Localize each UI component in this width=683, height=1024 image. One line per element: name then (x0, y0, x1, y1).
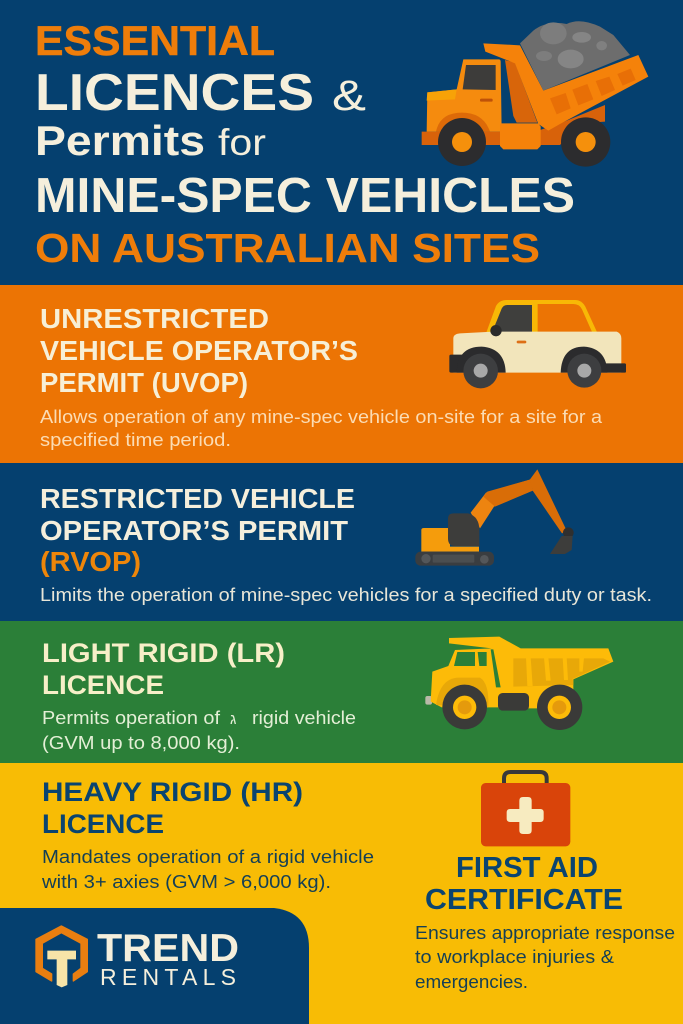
heading: UVOP: PERMIT (UVOP) (40, 367, 248, 398)
title: MINE-SPEC VEHICLES (35, 169, 575, 223)
text: LR description: rigid vehicle (252, 708, 356, 728)
text: HR description: Mandates operation of a rigid vehicle (42, 847, 374, 867)
heading: first aid certificate: CERTIFICATE (425, 884, 623, 916)
heading: UVOP: UNRESTRICTED (40, 303, 269, 334)
text: first aid description: Ensures appropriate response (415, 923, 675, 943)
panel: header (0, 0, 683, 285)
icon: Trend Rentals logo mark (36, 926, 87, 987)
heading: RVOP (40, 483, 355, 577)
title (35, 17, 575, 271)
icon: yellow dump truck (425, 637, 613, 730)
heading: RVOP: OPERATOR’S PERMIT (40, 515, 348, 546)
text: UVOP description: Allows operation of any mine-spec vehicle on-site for a site for a (40, 407, 603, 427)
title: ON AUSTRALIAN SITES (35, 225, 540, 271)
text: UVOP description (40, 407, 603, 450)
text: first aid description: emergencies. (415, 972, 528, 992)
text: first aid description: to workplace injuries & (415, 947, 614, 967)
title: Permits (35, 117, 205, 164)
panel: LR licence (0, 621, 683, 763)
text: LR description: (GVM up to 8,000 kg). (42, 733, 240, 753)
heading: HR: LICENCE (42, 809, 164, 839)
logo text: TREND (97, 927, 239, 970)
heading: UVOP: VEHICLE OPERATOR’S (40, 335, 358, 366)
icon: first aid kit (481, 772, 570, 846)
icon: excavator (415, 469, 574, 566)
title: ESSENTIAL (35, 17, 275, 64)
logo text (97, 927, 239, 990)
panel: logo (0, 908, 309, 1024)
text: LR description: ג (230, 711, 236, 728)
heading: HR: HEAVY RIGID (HR) (42, 777, 303, 807)
heading: UVOP (40, 303, 358, 398)
text: RVOP description: Limits the operation of mine-spec vehicles for a specified duty or task. (40, 585, 652, 605)
title: LICENCES (35, 64, 314, 122)
title: for (218, 122, 266, 163)
text: HR description: with 3+ axies (GVM > 6,000 kg). (41, 872, 331, 892)
logo text: RENTALS (100, 964, 236, 990)
heading: first aid certificate (425, 852, 623, 916)
heading: HR (42, 777, 303, 839)
icon: white car (449, 300, 626, 388)
heading: RVOP: (RVOP) (40, 546, 141, 577)
text: LR description: Permits operation of (42, 708, 221, 728)
text: UVOP description: specified time period. (40, 430, 231, 450)
heading: LR (42, 638, 285, 700)
panel: UVOP (0, 285, 683, 463)
panel: RVOP (0, 463, 683, 621)
heading: LR: LIGHT RIGID (LR) (42, 638, 285, 668)
icon: orange dump truck (422, 21, 648, 167)
text: LR description (42, 708, 356, 753)
heading: LR: LICENCE (42, 670, 164, 700)
text: HR description (41, 847, 374, 892)
heading: first aid certificate: FIRST AID (456, 852, 598, 884)
panel: HR licence and first aid (0, 763, 683, 1024)
title: & (332, 72, 366, 120)
heading: RVOP: RESTRICTED VEHICLE (40, 483, 355, 514)
text: first aid description (415, 923, 675, 992)
